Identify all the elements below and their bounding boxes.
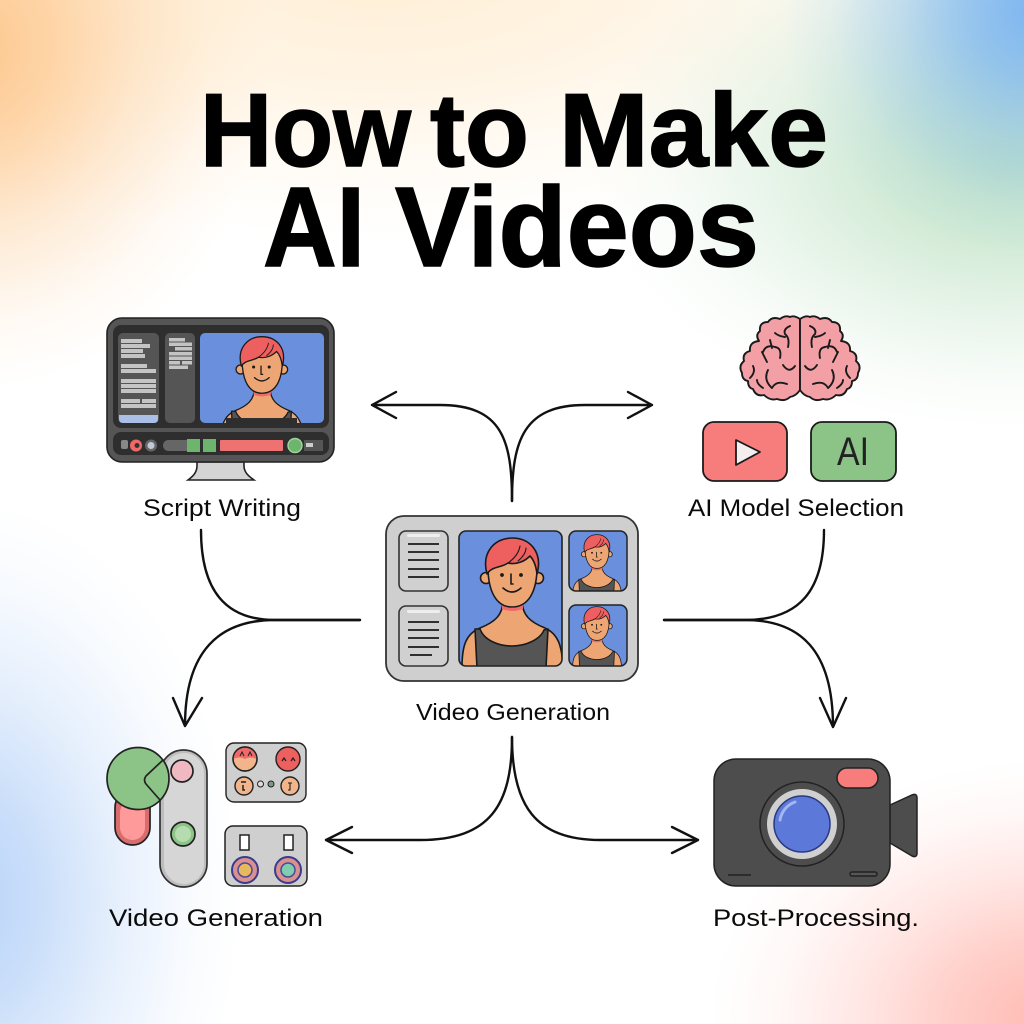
icon: generation controls: [107, 748, 207, 887]
panel: central video generation: [386, 516, 638, 681]
green pie: [107, 748, 169, 810]
face: top left: [233, 747, 257, 771]
title: Make: [559, 73, 828, 189]
title: AI: [263, 164, 365, 290]
green knob: [171, 822, 195, 846]
panel: audio dials: [225, 826, 307, 886]
icon: play button: [703, 422, 787, 481]
label: AI model selection: AI Model Selection: [688, 495, 904, 522]
icon: monitor with script editor: [107, 318, 334, 480]
red pill: [115, 790, 150, 845]
record indicator: [837, 768, 878, 788]
grey slider: [160, 750, 207, 887]
camera details: [728, 874, 751, 876]
face: bottom right: [281, 777, 299, 795]
arrow: bottom left: [326, 737, 512, 853]
notes panel: [165, 333, 195, 423]
monitor body: [107, 318, 334, 462]
camera body: [714, 759, 890, 886]
title: [200, 73, 828, 290]
lens: [760, 782, 844, 866]
brain left hemisphere: [740, 316, 800, 400]
document card bottom: [399, 606, 448, 666]
document card top: [399, 531, 448, 591]
video preview with presenter: [200, 333, 324, 423]
icon: AI badge: [811, 422, 896, 481]
panel frame: [386, 516, 638, 681]
panel: face presets: [226, 743, 306, 802]
arrow: to AI model selection: [512, 392, 652, 501]
label: script writing: Script Writing: [143, 495, 301, 522]
brain right hemisphere: [800, 316, 860, 400]
infographic canvas: [106, 90, 918, 931]
label: centre video generation: Video Generation: [416, 699, 610, 725]
monitor stand: [188, 462, 254, 480]
icon: AI badge: AI: [837, 430, 869, 474]
small presenter video top: [569, 531, 627, 598]
face: top right: [276, 747, 300, 771]
face: bottom left: [235, 777, 253, 795]
viewfinder: [890, 794, 917, 857]
label: post-processing: Post-Processing.: [713, 905, 919, 932]
icon: video camera: [714, 759, 917, 886]
label: lower video generation: Video Generation: [109, 905, 323, 932]
title: to: [430, 73, 529, 189]
arrows: flow connectors: [173, 392, 846, 853]
arrow: to post-processing: [664, 620, 846, 727]
arrow: script writing to centre: [201, 530, 360, 620]
small presenter video bottom: [569, 605, 627, 670]
arrow: bottom right: [512, 737, 698, 853]
arrow: to video generation: [173, 620, 360, 726]
title: How: [200, 73, 412, 189]
arrow: AI model selection to centre: [664, 530, 824, 620]
pink knob: [171, 760, 193, 782]
arrow: to script writing: [372, 392, 512, 501]
icon: brain: [740, 316, 860, 400]
main presenter video: [459, 531, 563, 668]
script panel: [118, 333, 159, 423]
title: Videos: [395, 164, 759, 290]
control bar: [121, 438, 323, 452]
